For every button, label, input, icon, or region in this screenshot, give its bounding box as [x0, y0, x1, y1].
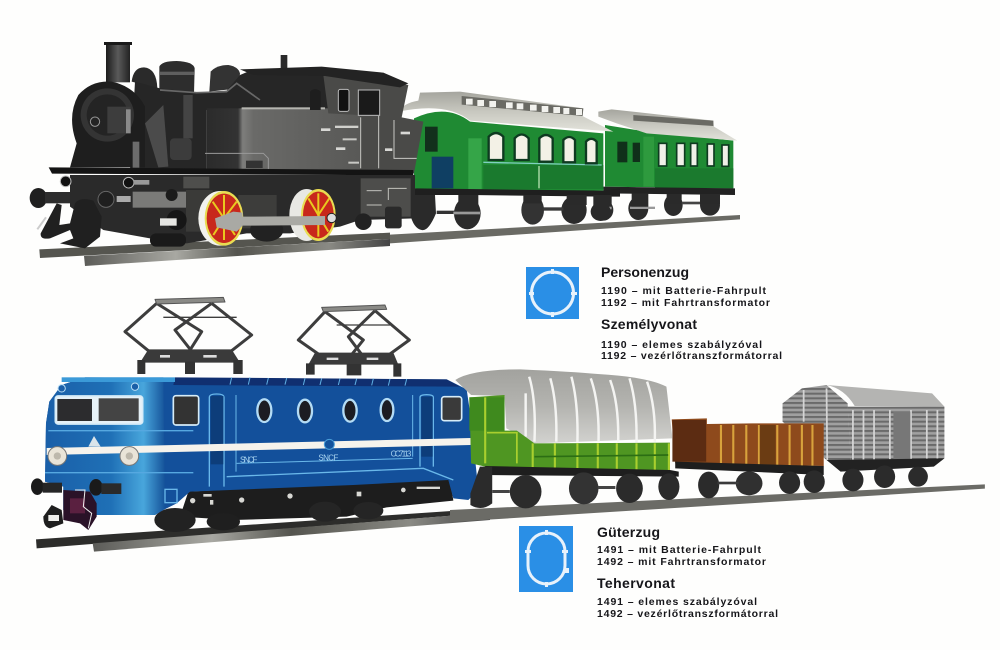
locomotive bogies	[154, 478, 453, 532]
rear carriage body	[605, 125, 733, 188]
text: Personenzug block: 1192 – vezérlőtranszformátorral	[601, 350, 782, 362]
valve gear detail	[145, 83, 260, 167]
passenger carriages	[390, 92, 740, 243]
van wheels	[827, 458, 944, 491]
green wagon underframe	[470, 466, 679, 508]
text: Personenzug block	[601, 264, 782, 362]
doors and side panel	[45, 394, 453, 503]
covered van	[783, 385, 944, 467]
body lettering: SNCF	[240, 456, 257, 465]
white stripe	[47, 438, 471, 455]
cab windows	[55, 396, 462, 425]
icon: circular track layout	[526, 267, 579, 319]
carriage track	[390, 215, 740, 243]
door panels	[211, 396, 433, 464]
boiler domes	[132, 55, 287, 93]
text: Personenzug block: 1190 – mit Batterie-Fahrpult	[601, 285, 766, 297]
connecting rod	[215, 212, 336, 232]
text: Güterzug block	[597, 524, 778, 620]
body lettering: S N C F	[318, 454, 338, 463]
open brown wagon	[672, 418, 824, 475]
text: Güterzug block: 1491 – elemes szabályzóval	[597, 596, 757, 608]
text: Güterzug block: 1492 – mit Fahrtransformator	[597, 556, 766, 568]
text: Güterzug block: 1492 – vezérlőtranszformátorral	[597, 608, 778, 620]
text: Güterzug block: Güterzug	[597, 524, 660, 540]
brown wagon wheels	[698, 470, 825, 498]
freight wagons	[450, 369, 985, 522]
front carriage roof	[398, 92, 613, 132]
side tank	[205, 107, 363, 170]
pantograph right	[298, 305, 409, 377]
front carriage underframe	[410, 188, 620, 230]
green flat wagon	[469, 395, 670, 473]
pantograph left	[125, 297, 252, 374]
rear carriage underframe	[593, 187, 735, 221]
text: Personenzug block: Personenzug	[601, 264, 689, 280]
boiler and piping	[130, 69, 330, 170]
headlamps	[48, 436, 139, 465]
porthole windows	[257, 399, 393, 422]
buffers and coupler	[31, 478, 121, 530]
front carriage body	[414, 112, 603, 191]
text: Personenzug block: 1190 – elemes szabályzóval	[601, 339, 762, 351]
body lettering: CC7113	[391, 450, 412, 459]
emblem	[324, 439, 334, 449]
red driving wheels	[198, 189, 336, 246]
text: Personenzug block: Személyvonat	[601, 316, 697, 332]
tarpaulin	[455, 369, 672, 443]
lower frame	[60, 175, 415, 243]
rear carriage roof	[598, 109, 737, 141]
icon: oval track layout	[519, 526, 573, 592]
electric locomotive	[31, 297, 490, 552]
body lettering	[240, 450, 412, 465]
locomotive track	[36, 508, 490, 552]
locomotive body	[45, 377, 478, 515]
smokebox front	[70, 81, 145, 168]
buffer and coupler	[30, 188, 186, 248]
freight track	[450, 484, 985, 522]
locomotive track	[39, 233, 390, 266]
dark roof vents	[58, 377, 460, 392]
text: Personenzug block: 1192 – mit Fahrtransformator	[601, 297, 770, 309]
cab front section	[45, 377, 165, 515]
text: Güterzug block: Tehervonat	[597, 575, 675, 591]
steam locomotive	[30, 42, 423, 266]
cab	[240, 67, 423, 173]
smokestack	[104, 42, 132, 82]
text: Güterzug block: 1491 – mit Batterie-Fahrpult	[597, 544, 762, 556]
running board	[49, 167, 413, 175]
